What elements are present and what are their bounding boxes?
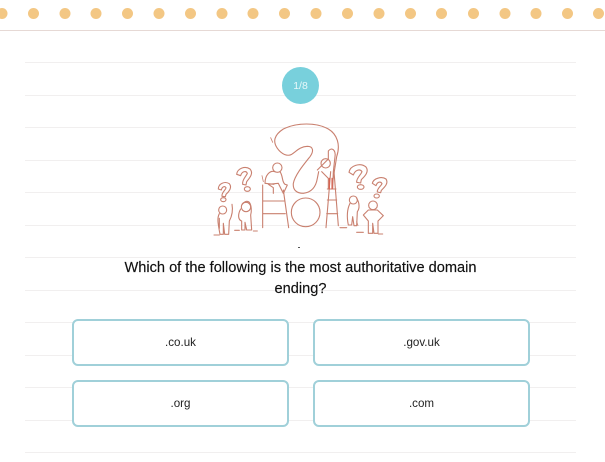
answer option: .gov.uk: [313, 319, 530, 366]
illustration: people around a question mark: [214, 124, 388, 236]
question text: [124, 260, 477, 297]
answer option: .gov.uk: .gov.uk: [403, 336, 440, 349]
answer option: .com: [313, 380, 530, 427]
left person 1: [219, 206, 227, 214]
right ladder: [326, 172, 338, 228]
small stray dot: [298, 247, 300, 248]
question mark dot: [291, 198, 320, 227]
small question marks: [237, 168, 252, 185]
right person 1: [349, 196, 357, 204]
seated person: [265, 171, 287, 193]
left person 2: [241, 202, 251, 212]
answer option: .co.uk: .co.uk: [165, 336, 196, 349]
left ladder: [263, 185, 289, 228]
answer option: .co.uk: [72, 319, 289, 366]
ground strokes: [214, 228, 383, 235]
answer option: .com: .com: [409, 397, 434, 410]
answer option: .org: .org: [170, 397, 190, 410]
answer option: .org: [72, 380, 289, 427]
progress badge: [282, 67, 319, 104]
header dotted band: [0, 8, 605, 31]
right person 2: [369, 201, 377, 210]
question text: Which of the following is the most authoritative domain: [124, 260, 477, 276]
question text: ending?: [275, 281, 326, 297]
big question mark: [275, 124, 338, 193]
climbing person: [321, 159, 330, 168]
progress badge: 1/8: [293, 80, 308, 92]
